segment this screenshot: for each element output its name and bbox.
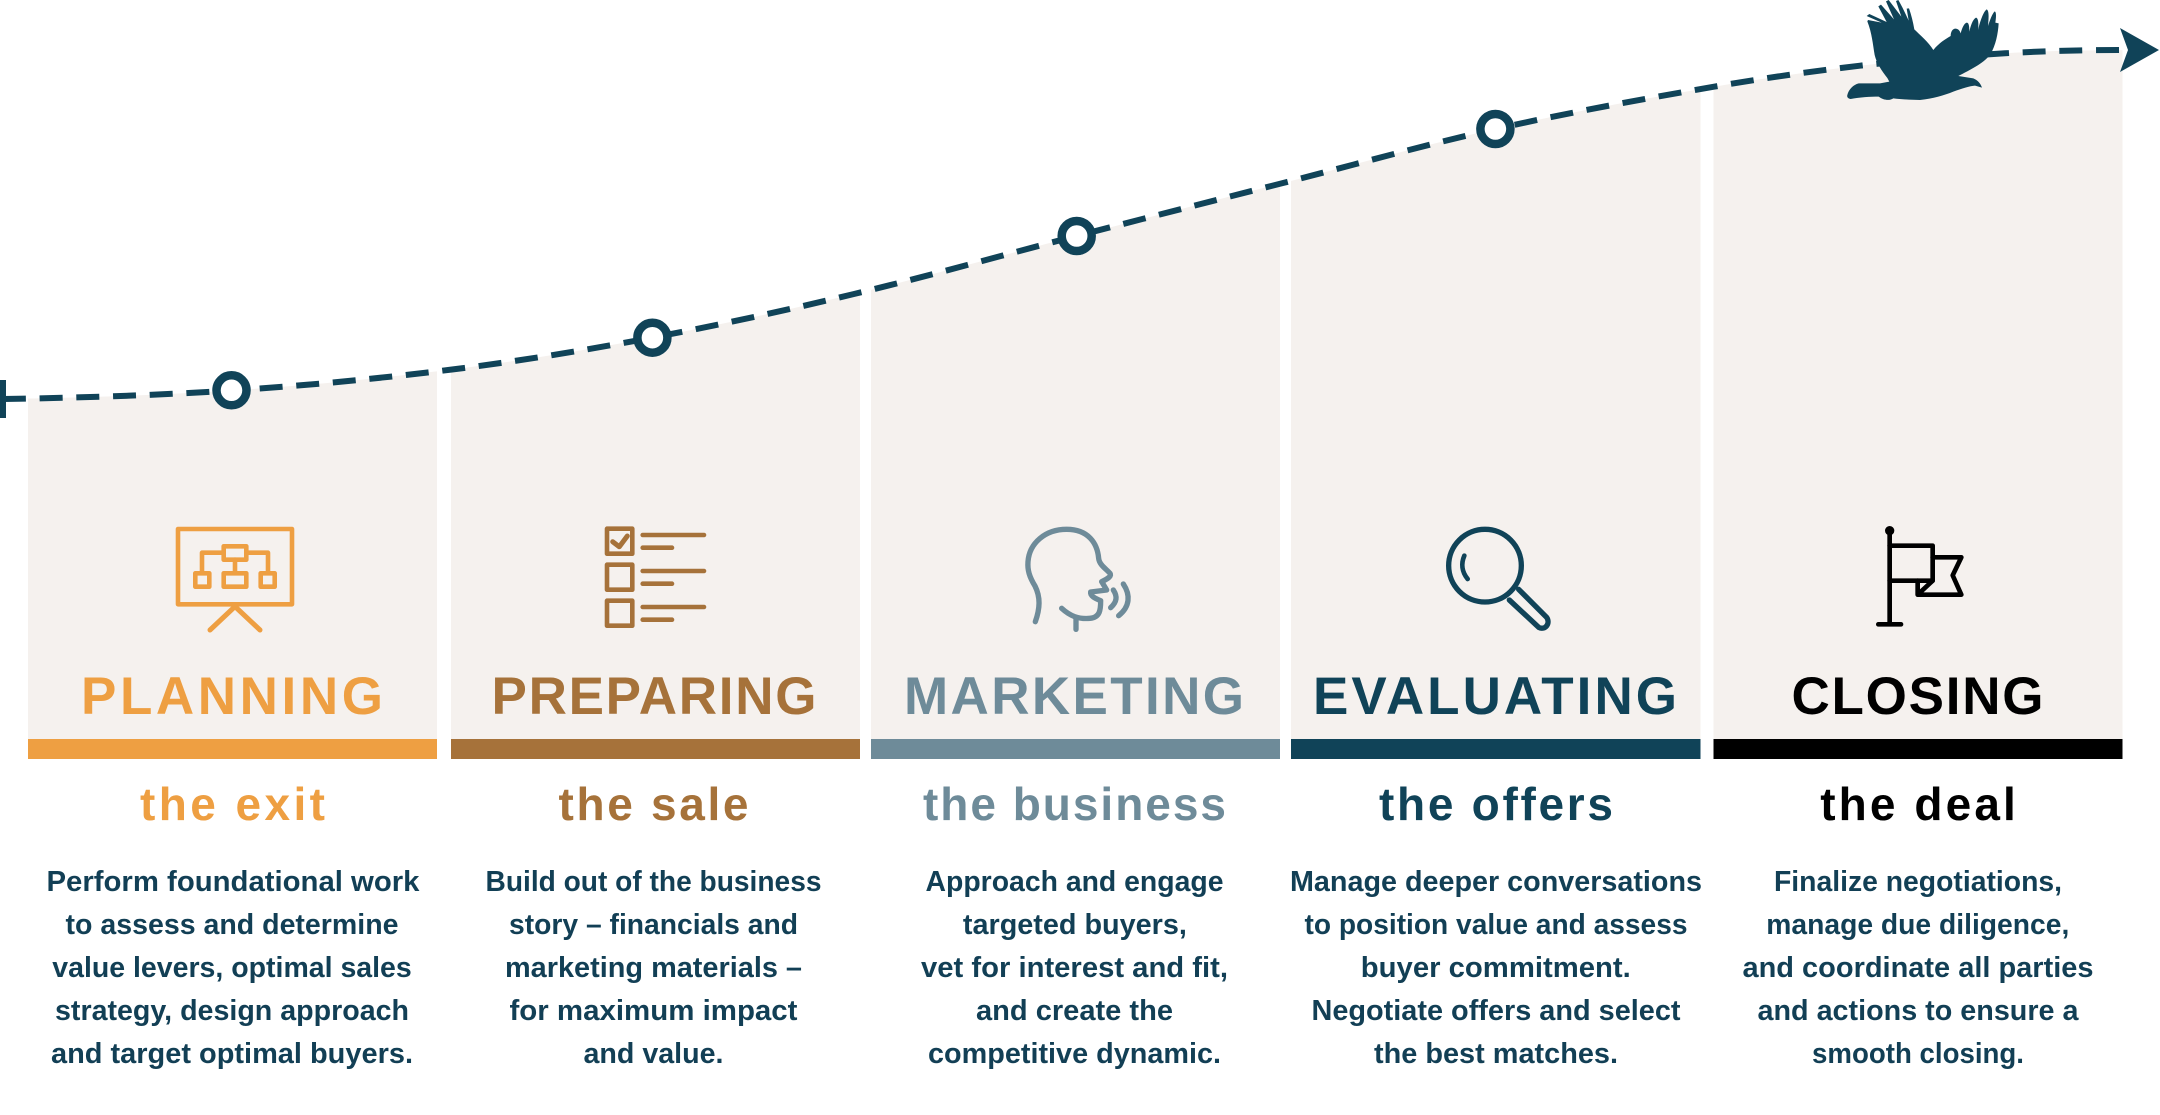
description: planning: strategy, design approach — [55, 995, 409, 1027]
milestone marker 3 — [1062, 221, 1092, 251]
description: closing — [1742, 866, 2094, 1070]
column: evaluating — [1290, 529, 1702, 1070]
description: preparing: for maximum impact — [510, 995, 798, 1027]
description: planning: Perform foundational work — [46, 866, 420, 898]
description: closing: manage due diligence, — [1766, 909, 2069, 941]
description: marketing: competitive dynamic. — [928, 1038, 1221, 1070]
colour bar: planning — [28, 739, 437, 759]
description: planning: value levers, optimal sales — [52, 952, 412, 984]
column: marketing — [871, 529, 1280, 1070]
description: evaluating: Negotiate offers and select — [1312, 995, 1681, 1027]
icon: eagle in flight — [1847, 0, 1999, 100]
description: preparing: and value. — [584, 1038, 724, 1070]
description: evaluating: to position value and assess — [1304, 909, 1688, 941]
description: evaluating: buyer commitment. — [1361, 952, 1631, 984]
subheading: the sale: the sale — [558, 778, 748, 830]
description: evaluating: the best matches. — [1374, 1038, 1618, 1070]
colour bar: marketing — [871, 739, 1280, 759]
icon: flag — [1878, 528, 1961, 624]
curve start tick — [0, 380, 6, 418]
colour bar: evaluating — [1291, 739, 1700, 759]
description: planning — [46, 866, 420, 1070]
description: marketing: vet for interest and fit, — [921, 952, 1228, 984]
description: preparing: story – financials and — [509, 909, 798, 941]
panel backgrounds under the curve — [28, 0, 2122, 740]
milestone marker 1 — [216, 375, 246, 405]
description: preparing: marketing materials – — [505, 952, 802, 984]
description: marketing — [921, 866, 1228, 1070]
icon: speaking head — [1028, 529, 1128, 629]
icon: magnifying glass — [1449, 529, 1548, 628]
description: preparing: Build out of the business — [486, 866, 822, 898]
description: evaluating — [1290, 866, 1702, 1070]
colour bar: closing — [1714, 739, 2122, 759]
description: marketing: Approach and engage — [926, 866, 1224, 898]
subheading: the business: the business — [923, 778, 1226, 830]
curve arrowhead — [2120, 28, 2159, 72]
description: closing: Finalize negotiations, — [1774, 866, 2062, 898]
description: evaluating: Manage deeper conversations — [1290, 866, 1702, 898]
description: planning: to assess and determine — [66, 909, 398, 941]
description: closing: and actions to ensure a — [1758, 995, 2080, 1027]
icon: checklist — [607, 529, 704, 626]
heading: preparing: PREPARING — [492, 667, 816, 726]
heading: planning: PLANNING — [81, 667, 383, 726]
description: preparing — [486, 866, 822, 1070]
description: marketing: targeted buyers, — [963, 909, 1187, 941]
description: planning: and target optimal buyers. — [51, 1038, 413, 1070]
heading: evaluating: EVALUATING — [1313, 667, 1677, 726]
dashed growth curve — [3, 50, 2125, 399]
milestone marker 4 — [1480, 114, 1510, 144]
icon: presentation board with org chart — [178, 529, 292, 630]
subheading: the deal: the deal — [1820, 778, 2016, 830]
description: marketing: and create the — [976, 995, 1173, 1027]
column: preparing — [451, 529, 860, 1070]
description: closing: and coordinate all parties — [1742, 952, 2094, 984]
heading: closing: CLOSING — [1792, 667, 2044, 726]
column: planning — [28, 529, 437, 1070]
subheading: the exit: the exit — [140, 778, 325, 830]
description: closing: smooth closing. — [1812, 1038, 2024, 1070]
colour bar: preparing — [451, 739, 860, 759]
subheading: the offers: the offers — [1379, 778, 1613, 830]
milestone marker 2 — [637, 323, 667, 353]
heading: marketing: MARKETING — [904, 667, 1244, 726]
column: closing — [1714, 528, 2122, 1070]
